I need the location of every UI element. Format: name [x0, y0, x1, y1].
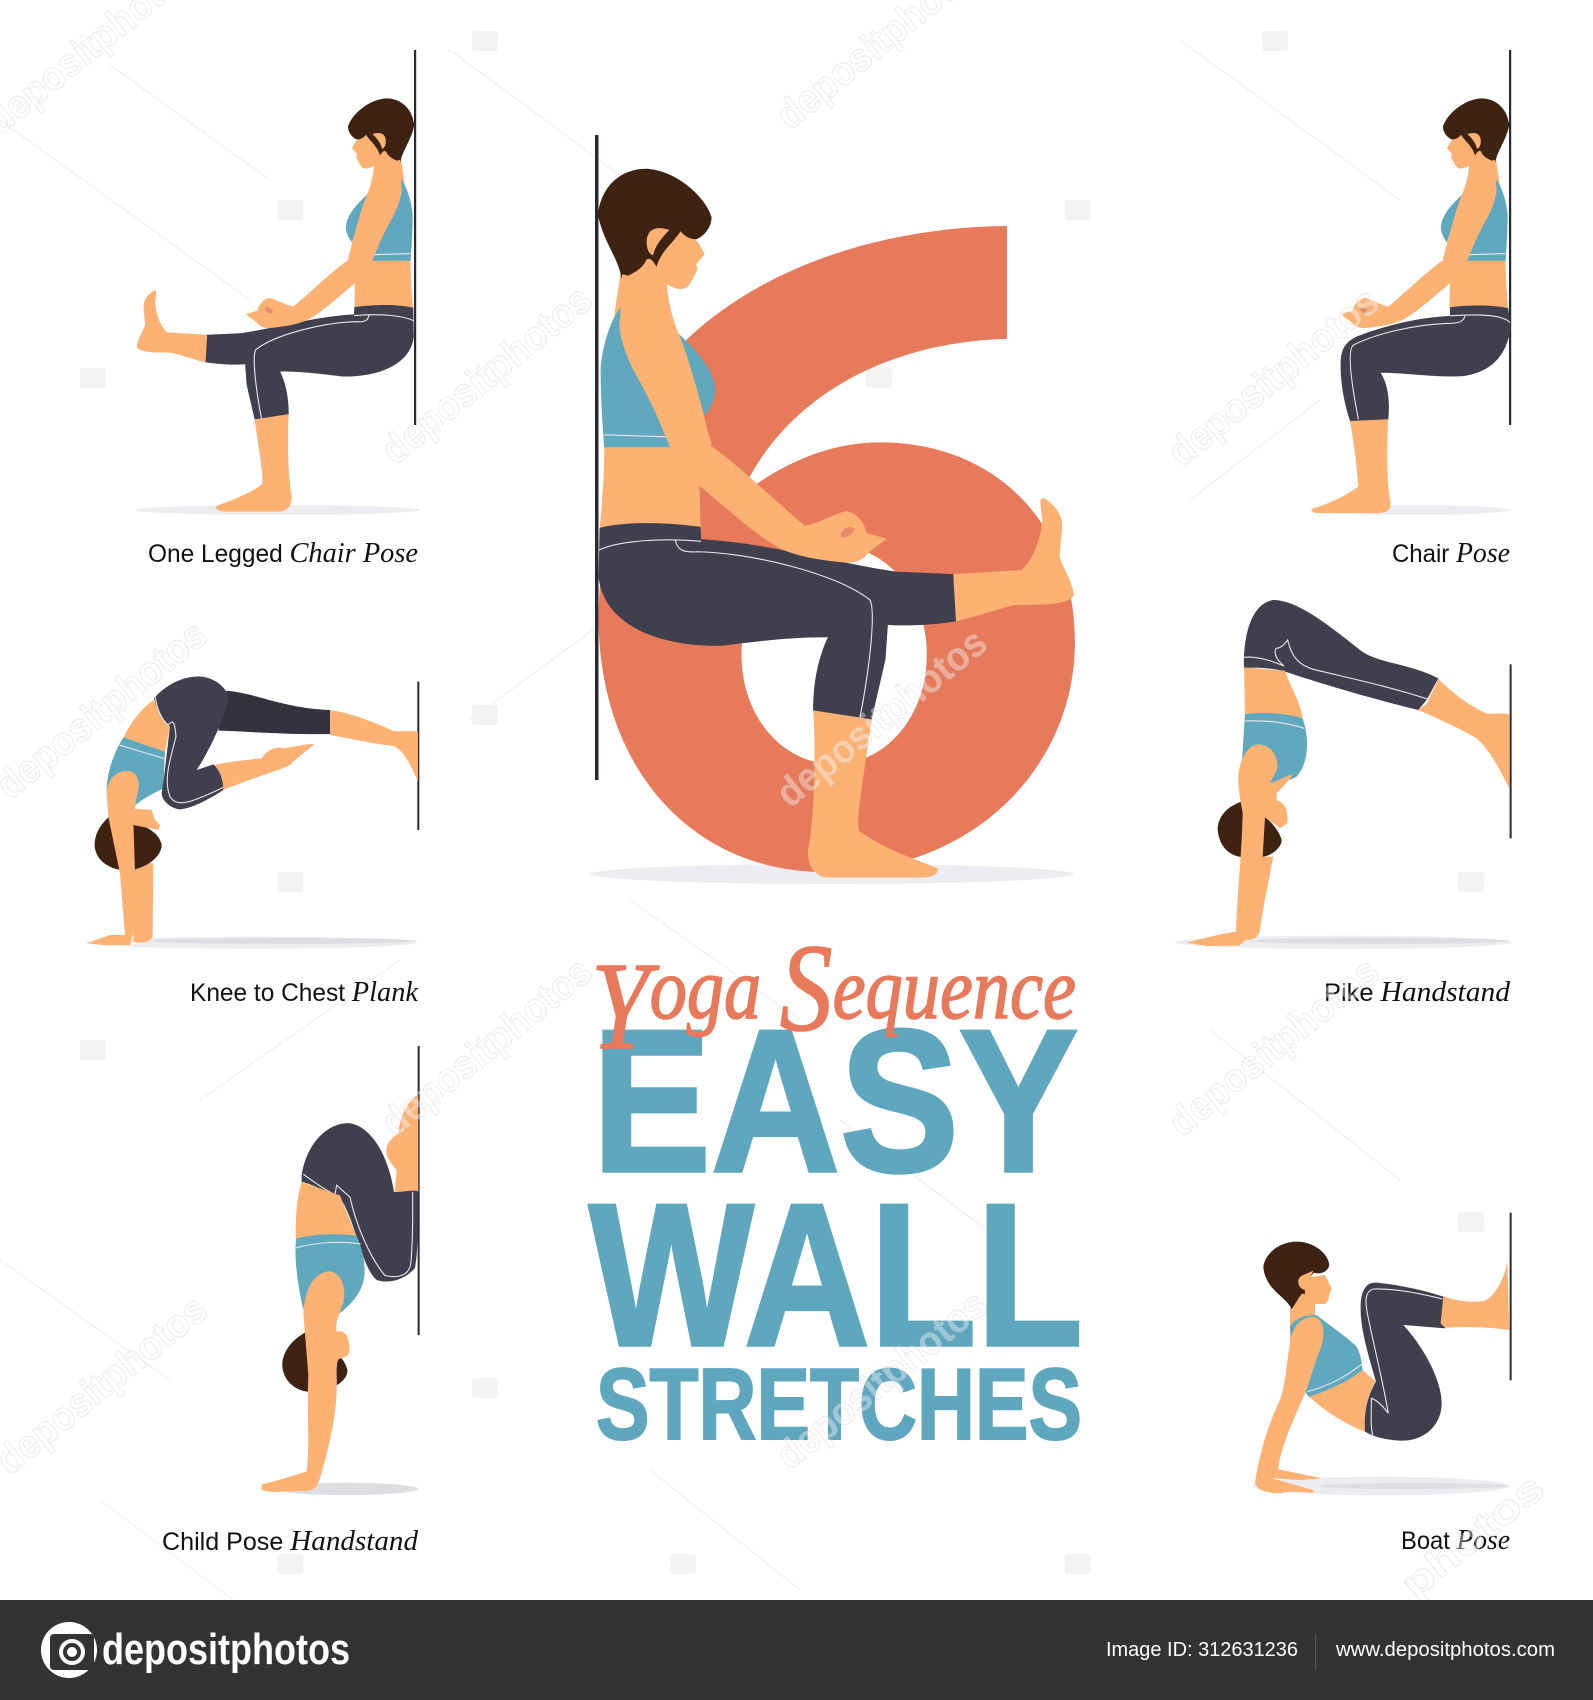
title: easy wall stretches [589, 988, 1083, 1461]
shadow [136, 505, 420, 515]
watermark text: depositphotos [1160, 279, 1387, 475]
subtitle: yoga sequence: equence [833, 941, 1076, 1038]
shadow [86, 937, 418, 949]
wall line [418, 1046, 420, 1335]
shadow [1310, 505, 1510, 515]
caption: Knee to Chest Plank [190, 976, 419, 1008]
shadow [275, 1483, 418, 1495]
image id: Image ID: 312631236 [1106, 1639, 1298, 1661]
figure [1187, 600, 1509, 946]
title: easy wall stretches: EASY [592, 988, 1078, 1215]
panel: pike handstand [1175, 600, 1512, 1008]
figure [1312, 98, 1511, 513]
panel: child pose handstand [162, 1046, 420, 1557]
figure [137, 98, 414, 512]
website url: www.depositphotos.com [1335, 1639, 1555, 1661]
big numeral 6 [599, 226, 1075, 872]
figure [87, 676, 418, 945]
main figure: one legged chair pose [598, 169, 1074, 878]
watermark text: depositphotos [768, 620, 995, 816]
title: easy wall stretches: STRETCHES [596, 1349, 1082, 1461]
wall line [1510, 664, 1512, 838]
footer bar [0, 1600, 1593, 1700]
caption: Chair Pose [1392, 537, 1510, 569]
wall line [1510, 1213, 1512, 1380]
watermark text: depositphotos [373, 277, 600, 473]
shadow [1175, 936, 1512, 949]
caption: Boat Pose [1401, 1524, 1510, 1556]
watermark text: photos [1393, 1466, 1553, 1607]
panel: knee to chest plank [86, 676, 419, 1008]
title: easy wall stretches: WALL [589, 1162, 1083, 1389]
logo icon: camera [41, 1622, 97, 1678]
panel: chair pose [1310, 50, 1511, 569]
shadow [1252, 1477, 1509, 1495]
watermark text: depositphotos [768, 1282, 995, 1478]
subtitle: yoga sequence: S [780, 920, 833, 1058]
main figure floor shadow [590, 864, 1074, 884]
panel: boat pose [1252, 1213, 1512, 1556]
figure [262, 1096, 418, 1492]
logo wordmark: depositphotos [102, 1625, 350, 1674]
subtitle: yoga sequence: Y [591, 938, 659, 1076]
wall line [1509, 50, 1511, 425]
watermark text: depositphotos [373, 949, 600, 1145]
wall line [414, 50, 416, 425]
main wall line [595, 135, 598, 780]
subtitle: yoga sequence: oga [650, 941, 780, 1038]
caption: Pike Handstand [1324, 976, 1510, 1008]
caption: Child Pose Handstand [162, 1525, 418, 1557]
watermark text: depositphotos [1160, 949, 1387, 1145]
figure [1255, 1242, 1509, 1493]
caption: One Legged Chair Pose [148, 537, 418, 569]
wall line [417, 682, 419, 830]
panel: one legged chair pose [136, 50, 420, 569]
